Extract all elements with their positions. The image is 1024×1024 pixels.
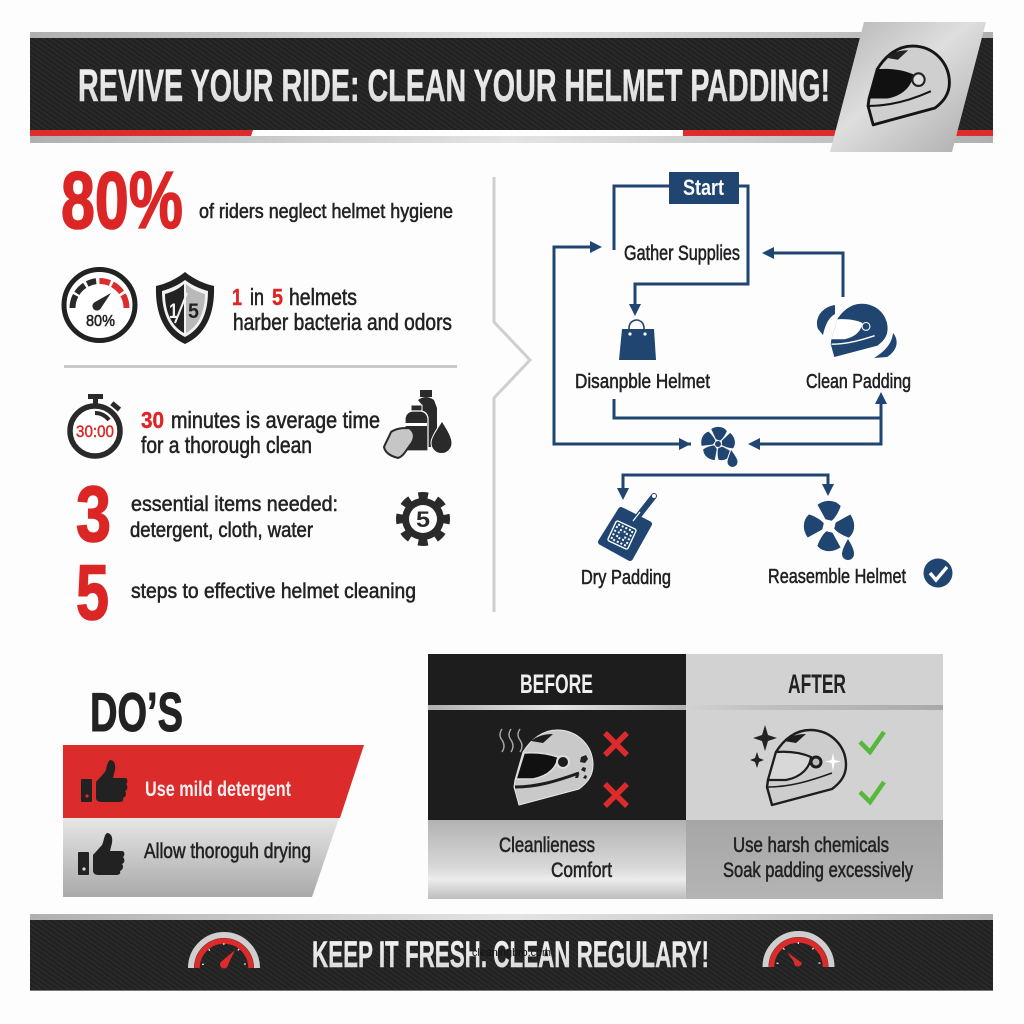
section divider chevron xyxy=(494,177,530,612)
stat: 5 steps: 5 xyxy=(76,548,109,636)
panel: do item 2: Allow thoroguh drying xyxy=(144,840,311,863)
panel: do item 2 xyxy=(63,818,339,897)
icon: padding brush xyxy=(601,494,656,558)
step: gather supplies: Gather Supplies xyxy=(624,242,740,265)
icon: right speedometer xyxy=(766,934,832,967)
stat: 1 in 5 helmets: helmets xyxy=(289,284,357,310)
icon: shield 1/5: 1 xyxy=(169,300,178,323)
icon: cleaning supplies xyxy=(384,390,452,458)
panel: after xyxy=(686,654,943,899)
stat: 3 essential items xyxy=(76,469,338,558)
footer banner xyxy=(30,914,993,991)
panel: before: BEFORE xyxy=(520,669,593,699)
panel: after: Soak padding excessively xyxy=(723,859,913,882)
icon: dirty helmet xyxy=(514,730,593,805)
icon: green checks xyxy=(860,732,884,802)
icon: gauge 80% xyxy=(64,270,135,340)
panel: do item 1 xyxy=(63,745,364,818)
header banner xyxy=(30,22,993,152)
stat: 3 essential items: detergent, cloth, water xyxy=(130,519,313,542)
panel: before xyxy=(428,654,686,899)
stat: 1 in 5 helmets: 1 xyxy=(232,284,242,310)
flowchart xyxy=(554,172,952,589)
icon: gear 5: 5 xyxy=(416,507,430,532)
stat: 1 in 5 helmets xyxy=(232,284,452,335)
stat: 30 minutes xyxy=(141,407,380,458)
icon: stopwatch xyxy=(70,394,121,456)
stat: 5 steps: steps to effective helmet cleaning xyxy=(131,579,416,603)
step: reassemble helmet: Reasemble Helmet xyxy=(768,565,906,588)
icon: left speedometer xyxy=(191,935,257,968)
panel: do item 1: Use mild detergent xyxy=(145,777,291,801)
stat: 80 percent xyxy=(61,156,453,246)
icon: thumbs up xyxy=(81,760,127,802)
panel: before: Cleanlieness xyxy=(499,834,595,857)
watermark: cleaningbro.com xyxy=(472,947,551,959)
heading: do's: DO’S xyxy=(90,681,183,743)
step: dry padding: Dry Padding xyxy=(581,566,671,589)
icon: thumbs up xyxy=(78,833,124,875)
icon: clean helmet xyxy=(767,730,846,805)
stat: 1 in 5 helmets: in xyxy=(250,284,264,310)
stat: 1 in 5 helmets: harber bacteria and odors xyxy=(233,309,452,335)
icon: header helmet xyxy=(868,46,949,125)
start box xyxy=(669,172,739,204)
footer message: KEEP IT FRESH. CLEAN REGULARY! xyxy=(312,934,709,975)
icon: blue helmet xyxy=(817,304,897,358)
stat: 1 in 5 helmets: 5 xyxy=(272,284,283,310)
stat: 30 minutes: minutes is average time xyxy=(171,407,380,433)
step: clean padding: Clean Padding xyxy=(806,370,911,393)
icon: gear 5 xyxy=(400,496,446,542)
flow connectors xyxy=(554,186,887,500)
icon: check badge xyxy=(924,558,952,588)
icon: small fan xyxy=(700,427,738,468)
icon: odor lines xyxy=(500,729,522,752)
stat: 3 essential items: essential items needed: xyxy=(131,492,338,516)
start box: Start xyxy=(683,175,725,200)
stat: 80 percent: 80% xyxy=(61,156,183,246)
icon: shield 1/5 xyxy=(156,272,214,344)
icon: large fan xyxy=(803,500,855,560)
stat: 30 minutes: for a thorough clean xyxy=(141,432,312,458)
stat: 30 minutes: 30 xyxy=(141,407,164,433)
stat: 5 steps xyxy=(76,548,416,636)
panel: after: AFTER xyxy=(788,669,846,699)
icon: sparkles xyxy=(750,725,777,768)
step: disassemble helmet: Disanpble Helmet xyxy=(575,370,710,393)
icon: red crosses xyxy=(605,733,627,806)
icon: stopwatch: 30:00 xyxy=(76,423,114,441)
silver tag xyxy=(830,22,986,152)
icon: bag xyxy=(619,320,656,360)
panel: before: Comfort xyxy=(551,859,612,882)
panel: after: Use harsh chemicals xyxy=(733,834,889,857)
stat: 80 percent: of riders neglect helmet hygiene xyxy=(199,201,453,223)
icon: gauge 80%: 80% xyxy=(86,313,115,330)
icon: shield 1/5: 5 xyxy=(188,300,199,323)
stat: 3 essential items: 3 xyxy=(76,469,111,558)
